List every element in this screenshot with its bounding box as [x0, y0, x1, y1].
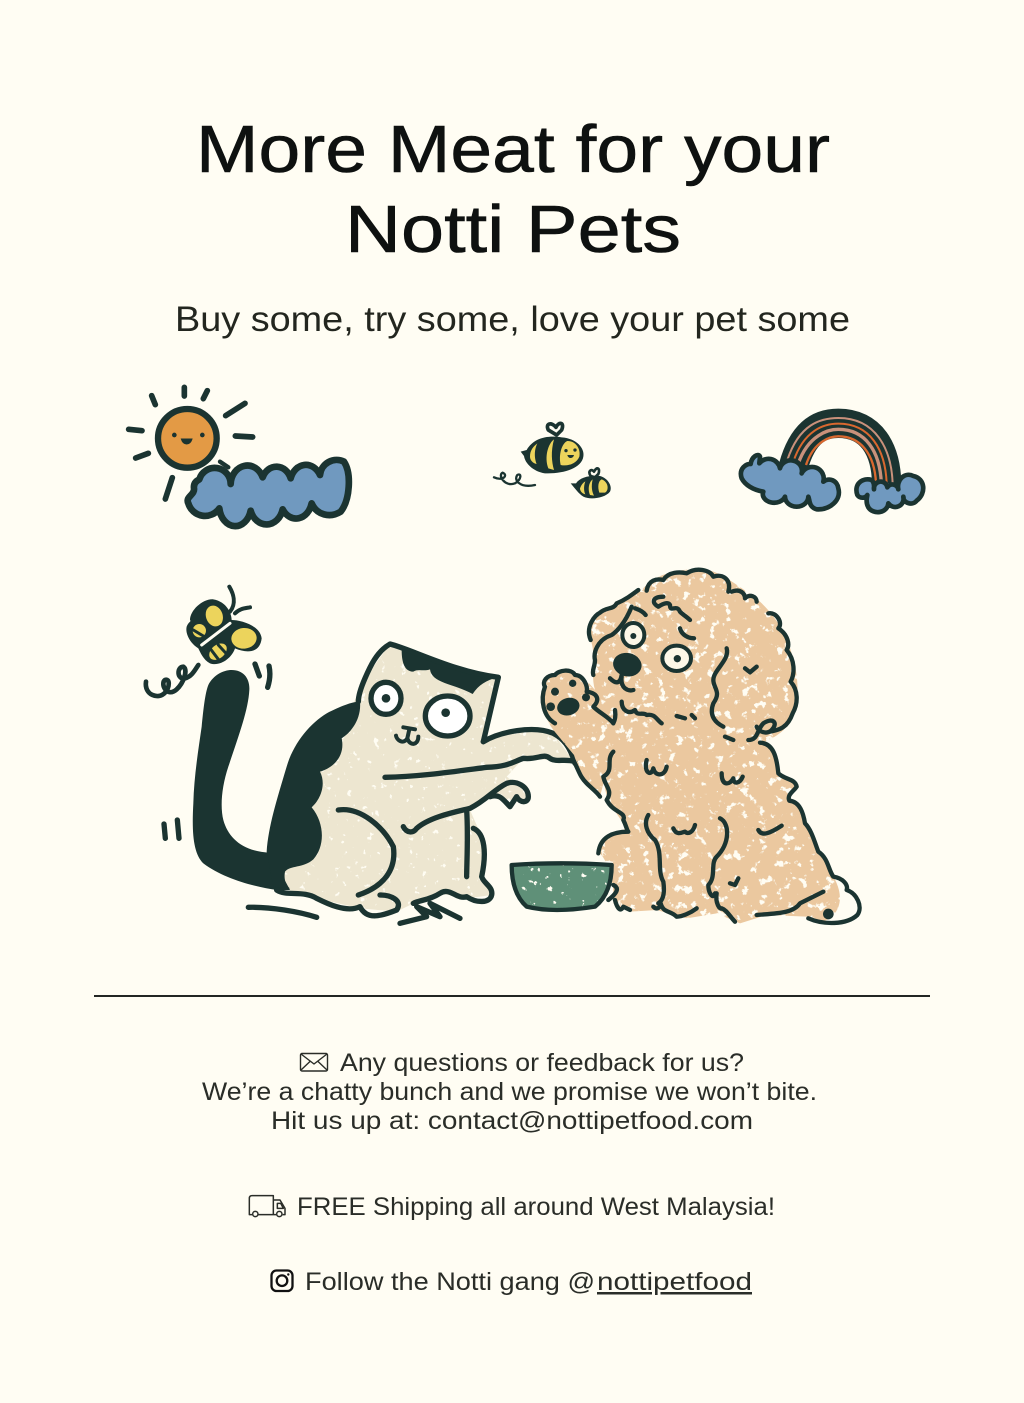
handle: nottipetfood: [597, 1268, 752, 1296]
cat: [146, 587, 575, 923]
icon: instagram: [272, 1270, 292, 1291]
rainbow: [787, 418, 893, 483]
sun: [129, 387, 253, 499]
dog: [512, 568, 860, 923]
contact block: [202, 1049, 817, 1135]
shipping text: FREE Shipping all around West Malaysia!: [297, 1193, 775, 1221]
contact text: We’re a chatty bunch and we promise we won’t bite.: [202, 1078, 817, 1106]
contact text: [202, 1049, 817, 1135]
icon: truck: [249, 1196, 285, 1217]
food bowl: [512, 863, 612, 910]
illustration: sun and cloud: [129, 387, 349, 526]
tail squiggle: [146, 665, 198, 696]
divider: [94, 995, 930, 997]
contact text: Any questions or feedback for us?: [340, 1049, 744, 1077]
icon: envelope: [300, 1054, 328, 1071]
cat face: [371, 682, 470, 744]
dog face: [611, 623, 691, 679]
title: [196, 112, 830, 267]
dog fur: [542, 568, 840, 923]
cat body: [280, 644, 575, 912]
subtitle: Buy some, try some, love your pet some: [175, 300, 850, 339]
bees: [494, 423, 611, 498]
butterfly: [186, 587, 262, 664]
title: Notti Pets: [345, 192, 681, 267]
dog paw pads: [546, 680, 590, 718]
cloud: [188, 460, 349, 526]
bee trail: [494, 473, 535, 486]
social line: [272, 1268, 752, 1296]
contact text: Hit us up at: contact@nottipetfood.com: [271, 1107, 753, 1135]
cat back patch: [267, 702, 360, 888]
social text: Follow the Notti gang @: [305, 1268, 595, 1296]
rainbow with clouds: [741, 418, 923, 512]
cat tail: [193, 670, 290, 890]
cat outlines: [164, 644, 575, 923]
dog tail tip: [823, 909, 834, 919]
cat head patch: [402, 650, 497, 694]
left rainbow cloud: [741, 455, 839, 509]
title: More Meat for your: [196, 112, 830, 187]
right rainbow cloud: [856, 475, 923, 512]
shipping line: [249, 1193, 775, 1221]
small bee: [571, 468, 611, 498]
dog outlines: [543, 570, 860, 923]
big bee: [521, 423, 584, 473]
